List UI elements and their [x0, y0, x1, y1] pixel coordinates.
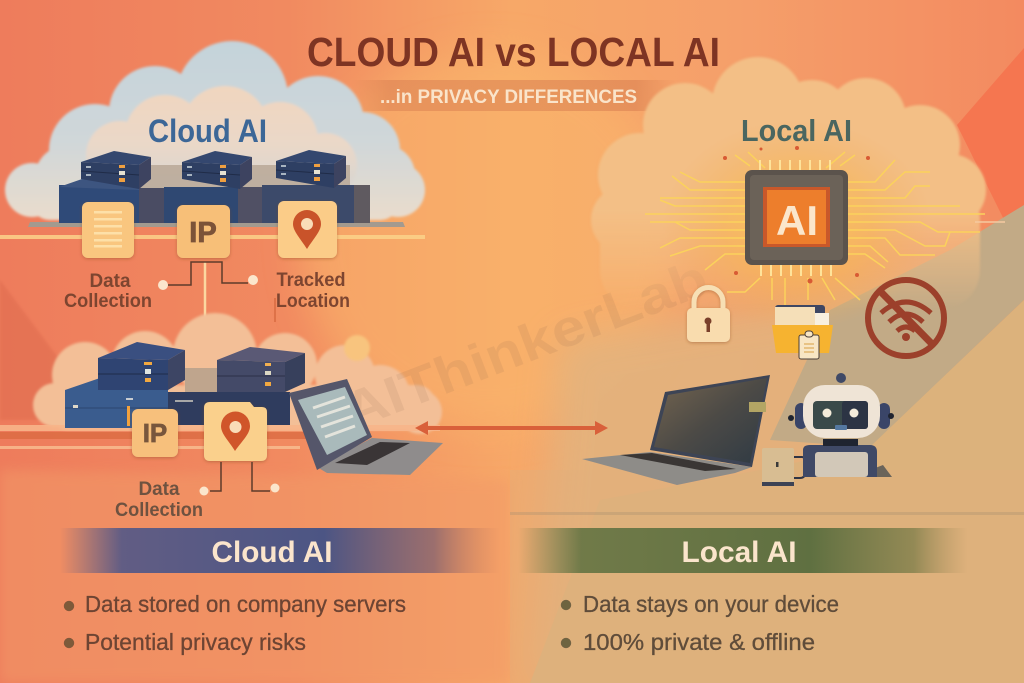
icon: AI chip: AI: [776, 197, 818, 244]
subtitle band: [350, 80, 675, 111]
arrow: double-headed: [415, 421, 608, 435]
icon: cloud laptop: [289, 379, 443, 475]
divider line: upper shelf: [0, 235, 425, 239]
circuit traces: [645, 120, 1005, 330]
icon: no wifi: [868, 280, 944, 356]
label: Data Collection upper: [64, 271, 152, 312]
card: location folder: [204, 402, 267, 461]
header bar: Local AI: Local AI: [682, 536, 796, 569]
label: Tracked Location: Location: [276, 291, 350, 312]
label: Data Collection upper: Data: [90, 271, 131, 292]
connectors: upper IP: [158, 262, 275, 322]
card: IP lower: IP: [143, 418, 167, 448]
cloud: lower: [33, 313, 442, 434]
card: IP: IP: [189, 217, 217, 249]
label: Data Collection lower: Data: [138, 479, 180, 500]
server rack: upper cloud: [28, 150, 405, 227]
card: IP lower: [132, 409, 178, 457]
icon: robot: [788, 373, 894, 477]
list: Local AI points: Data stays on your device: [583, 591, 839, 617]
icon: mug: [762, 448, 805, 486]
icon: folder: [772, 305, 833, 359]
stripes: lower shelf: [0, 425, 440, 449]
label: Data Collection lower: [115, 479, 203, 521]
icon: local laptop: [582, 375, 770, 485]
card: IP: [177, 205, 230, 258]
watermark: AIThinkerLab: [336, 249, 716, 441]
header bar: Cloud AI: Cloud AI: [212, 536, 332, 569]
label: Data Collection lower: Collection: [115, 500, 203, 521]
icon: AI chip: [745, 170, 848, 265]
list: Cloud AI points: Potential privacy risks: [85, 629, 306, 655]
card: document: [82, 202, 134, 258]
list: Local AI points: 100% private & offline: [583, 629, 815, 655]
icon: padlock: [687, 288, 730, 342]
list: Local AI points: [561, 591, 839, 655]
server rack: lower cloud: [65, 342, 305, 428]
label: Tracked Location: [276, 270, 350, 312]
header bar: Cloud AI: [60, 528, 500, 573]
heading: Local AI: Local AI: [741, 113, 852, 148]
header bar: Local AI: [518, 528, 968, 573]
heading: Cloud AI: Cloud AI: [148, 113, 267, 149]
subtitle band: ...in PRIVACY DIFFERENCES: [380, 87, 637, 108]
list: Cloud AI points: Data stored on company servers: [85, 591, 406, 617]
cloud: Cloud AI: [5, 41, 425, 220]
list: Cloud AI points: [64, 591, 406, 655]
label: Tracked Location: Tracked: [276, 270, 346, 291]
title: CLOUD AI vs LOCAL AI: [307, 29, 720, 75]
connectors: lower pin card: [200, 462, 280, 496]
cloud: Local AI: [591, 57, 986, 310]
label: Data Collection upper: Collection: [64, 291, 152, 312]
card: location pin: [278, 201, 337, 258]
